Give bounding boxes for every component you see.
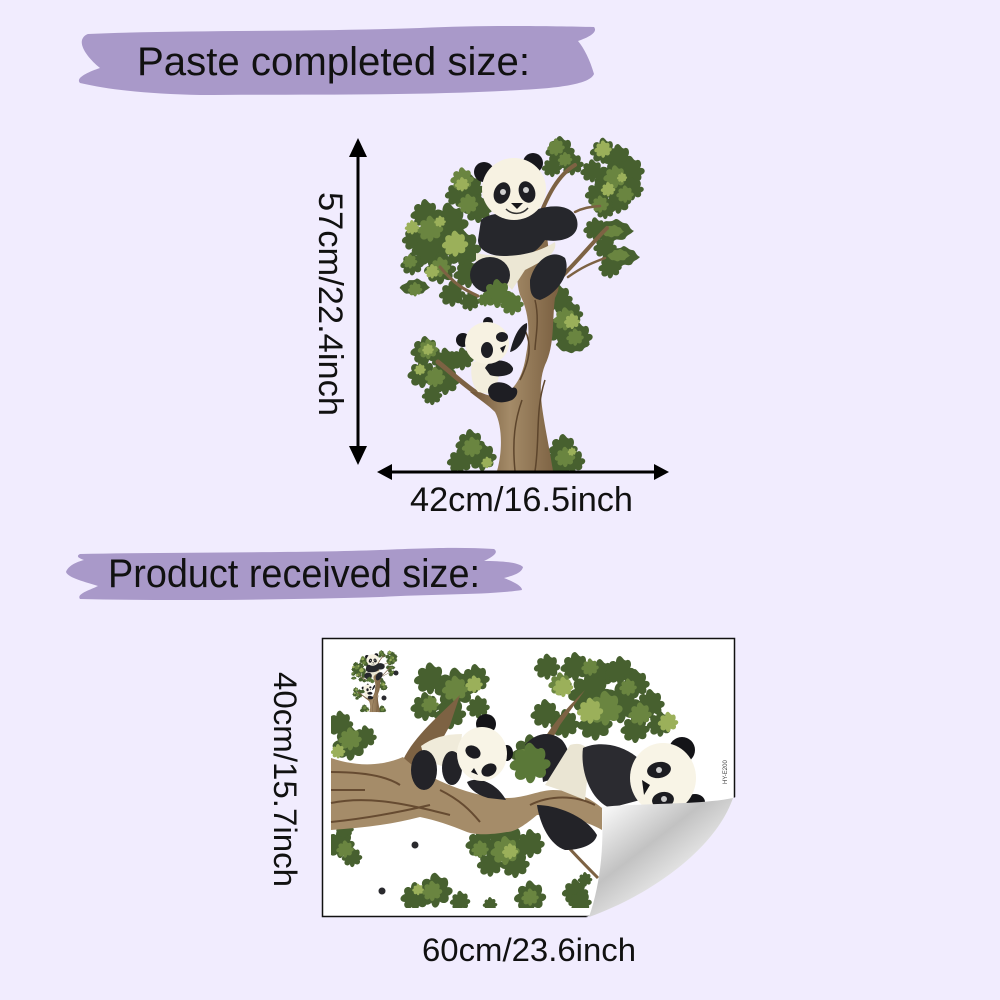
large panda bbox=[470, 153, 577, 300]
banner: product received size: Product received size: bbox=[108, 552, 480, 596]
sheet right panda bbox=[525, 734, 705, 850]
sheet background bbox=[322, 638, 734, 916]
banner: paste completed size: Paste completed size: bbox=[137, 40, 530, 84]
trunk bark streaks bbox=[514, 300, 545, 471]
sheet branch bbox=[331, 690, 602, 878]
mini tree thumbnail bbox=[351, 650, 397, 713]
foliage over right panda bbox=[510, 743, 551, 783]
small panda bbox=[456, 317, 527, 402]
height arrow: 57cm bbox=[349, 138, 367, 465]
banner: paste completed size bbox=[79, 26, 595, 95]
label: height 40cm: 40cm/15.7inch bbox=[267, 672, 303, 887]
label: height 57cm: 57cm/22.4inch bbox=[311, 192, 349, 416]
trunk bbox=[470, 225, 559, 471]
peeled corner bbox=[586, 797, 736, 918]
sheet foliage bbox=[326, 652, 678, 913]
back foliage bbox=[400, 136, 645, 477]
product code: HY-E200 bbox=[723, 760, 729, 784]
branches bbox=[438, 165, 607, 403]
product sheet bbox=[322, 638, 736, 918]
width arrow: 42cm bbox=[377, 464, 669, 480]
label: width 42cm: 42cm/16.5inch bbox=[410, 481, 633, 519]
label: width 60cm: 60cm/23.6inch bbox=[422, 932, 636, 968]
sheet left panda bbox=[411, 714, 513, 800]
small decal dots bbox=[378, 670, 418, 894]
illustration: pandas climbing tree bbox=[400, 136, 645, 477]
foliage over panda leg bbox=[478, 279, 524, 315]
